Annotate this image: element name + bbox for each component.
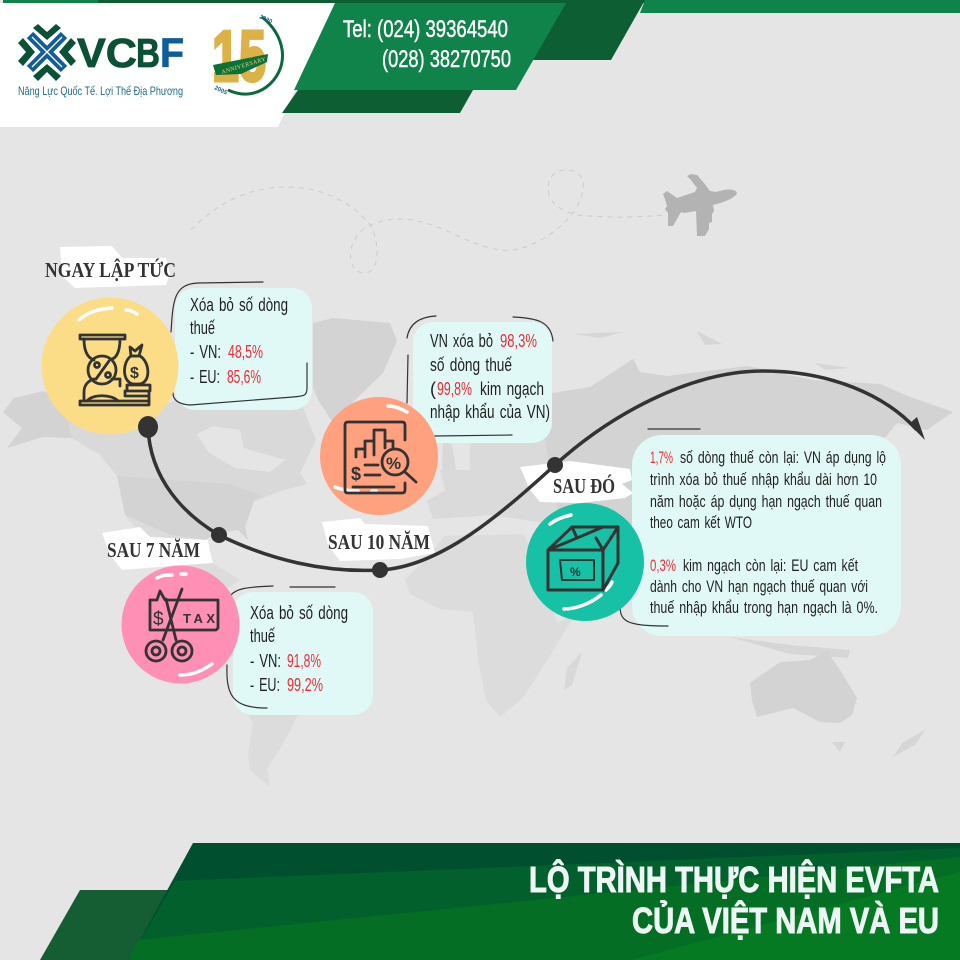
label: sau 7 nam: SAU 7 NĂM bbox=[107, 538, 200, 562]
Mediterranean Sea bbox=[436, 520, 530, 536]
label: ngay lap tuc: NGAY LẬP TỨC bbox=[45, 258, 176, 282]
logo wordmark: F bbox=[160, 30, 184, 76]
panel: sau do text: số dòng thuế còn lại: VN áp dụng lộ bbox=[680, 449, 886, 467]
panel: sau do text: kim ngạch còn lại: EU cam kết bbox=[683, 557, 858, 575]
map: Alaska bbox=[3, 391, 72, 448]
icon circle: box with percent: % bbox=[570, 565, 581, 579]
panel: ngay lap tuc text: thuế bbox=[190, 318, 215, 338]
logo wordmark: B bbox=[136, 30, 160, 76]
logo tagline: Năng Lực Quốc Tế. Lợi Thế Địa Phương bbox=[18, 84, 183, 98]
icon: airplane bbox=[663, 174, 737, 236]
panel: ngay lap tuc text bbox=[171, 282, 312, 410]
map: Greenland bbox=[313, 318, 397, 423]
panel: sau do text: trình xóa bỏ thuế nhập khẩu dài hơn 10 bbox=[650, 471, 877, 489]
icon: logo mark bbox=[18, 24, 76, 81]
panel: sau 7 nam text: 99,2% bbox=[287, 675, 323, 695]
15 anniversary badge: 15 bbox=[212, 17, 266, 97]
map: Madagascar bbox=[564, 652, 582, 690]
label: sau 10 nam bbox=[322, 518, 435, 561]
label: sau do: SAU ĐÓ bbox=[553, 474, 615, 498]
map: South America bbox=[240, 592, 370, 787]
label: sau 10 nam: SAU 10 NĂM bbox=[328, 530, 430, 554]
panel: sau do text: 1,7% bbox=[650, 449, 673, 467]
timeline dots bbox=[138, 416, 563, 578]
panel: ngay lap tuc text: 48,5% bbox=[228, 342, 263, 362]
panel: ngay lap tuc text: - VN: bbox=[190, 342, 221, 362]
map: United States bbox=[117, 476, 262, 540]
logo wordmark bbox=[77, 30, 184, 76]
label: sau 7 nam bbox=[102, 527, 213, 570]
footer: back panel bbox=[40, 890, 190, 960]
label: ngay lap tuc bbox=[45, 246, 176, 288]
phone numbers: Tel: (024) 39364540 bbox=[343, 16, 508, 43]
icon circle: tax scissors: $ bbox=[153, 609, 164, 630]
roadmap curve with arrow bbox=[148, 371, 925, 570]
panel: sau 10 nam text: nhập khẩu của VN) bbox=[430, 402, 550, 422]
VCBF logo bbox=[18, 24, 184, 98]
panel: sau 10 nam text: 98,3% bbox=[500, 331, 537, 351]
label: sau do bbox=[520, 461, 633, 503]
icon circle: hourglass and money bag: $ bbox=[130, 365, 139, 382]
panel: sau 7 nam text: 91,8% bbox=[287, 651, 321, 671]
footer: main panel bbox=[129, 843, 960, 960]
panel: sau 7 nam text: - EU: bbox=[250, 675, 280, 695]
header: top stripe bbox=[3, 0, 960, 13]
icon circle: hourglass and money bag bbox=[42, 298, 178, 434]
map: Africa bbox=[405, 530, 575, 717]
panel: sau 7 nam text: Xóa bỏ số dòng bbox=[250, 603, 348, 623]
arrow head bbox=[909, 417, 925, 440]
dashed flight path bbox=[191, 170, 664, 273]
panel: sau do text: năm hoặc áp dụng hạn ngạch thuế quan bbox=[650, 493, 882, 511]
header: dark green shape bottom bbox=[282, 90, 473, 113]
map: Australia bbox=[750, 651, 857, 723]
header: dark green shape right bbox=[533, 0, 645, 60]
panel: sau 10 nam text: VN xóa bỏ bbox=[430, 331, 493, 351]
map: British Isles bbox=[442, 440, 456, 472]
panel: sau 7 nam text: thuế bbox=[250, 626, 275, 646]
world map background bbox=[3, 318, 953, 787]
icon circle: tax scissors bbox=[122, 566, 240, 684]
panel: sau 10 nam text bbox=[407, 316, 553, 443]
panel: sau 7 nam text: - VN: bbox=[250, 651, 281, 671]
icon circle: tax scissors: TAX bbox=[183, 611, 215, 626]
map: Europe bbox=[427, 420, 560, 525]
panel: sau 7 nam text bbox=[227, 586, 373, 715]
footer title bbox=[529, 858, 939, 941]
icon circle: report with magnifier: % bbox=[386, 454, 401, 473]
icon circle: box with percent bbox=[526, 503, 644, 621]
panel: sau do text: thuế nhập khẩu trong hạn ngạch là 0%. bbox=[650, 599, 878, 617]
15 anniversary badge: 2005 bbox=[213, 85, 228, 97]
header: green phone panel bbox=[294, 3, 566, 90]
icon circle: report with magnifier: $ bbox=[351, 464, 361, 484]
panel: sau do text: dành cho VN hạn ngạch thuế quan với bbox=[650, 578, 868, 596]
panel: sau 10 nam text: ( bbox=[430, 379, 436, 399]
map: small islands bbox=[573, 331, 925, 757]
panel: sau 10 nam text: số dòng thuế bbox=[430, 355, 512, 375]
panel: sau 10 nam text: 99,8% bbox=[437, 379, 472, 399]
15 anniversary badge: 2020 bbox=[258, 14, 273, 26]
phone numbers: (028) 38270750 bbox=[382, 46, 511, 73]
panel: sau do text bbox=[620, 429, 901, 636]
logo wordmark: VC bbox=[77, 30, 137, 76]
panel: sau 10 nam text: kim ngạch bbox=[480, 379, 544, 399]
phone numbers bbox=[343, 16, 511, 73]
map: Central America bbox=[125, 515, 240, 590]
Hudson Bay bbox=[197, 426, 285, 472]
map: Indonesia bbox=[730, 637, 850, 658]
panel: sau do text: 0,3% bbox=[650, 557, 676, 575]
icon circle: report with magnifier bbox=[320, 397, 438, 515]
panel: sau do text: theo cam kết WTO bbox=[650, 514, 752, 532]
panel: ngay lap tuc text: 85,6% bbox=[227, 367, 261, 387]
map: Asia bbox=[510, 359, 953, 632]
map: Canada bbox=[60, 400, 316, 501]
panel: ngay lap tuc text: - EU: bbox=[190, 367, 220, 387]
15 anniversary badge: ANNIVERSARY bbox=[221, 57, 267, 76]
header: white logo panel bbox=[0, 3, 335, 127]
panel: ngay lap tuc text: Xóa bỏ số dòng bbox=[190, 295, 288, 315]
